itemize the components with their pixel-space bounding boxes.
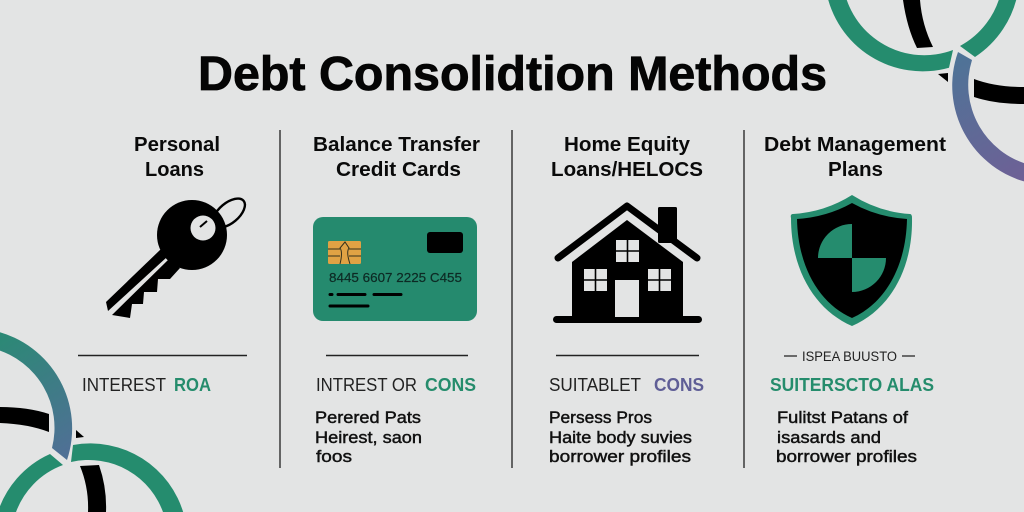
body text <box>776 409 917 466</box>
body text: foos <box>316 448 352 466</box>
row label: suitable cons: SUITABLET <box>549 375 641 395</box>
body text: borrower profiles <box>776 448 917 466</box>
heading: personal loans: Loans <box>145 159 204 181</box>
body text: Fulitst Patans of <box>777 409 908 427</box>
heading: personal loans: Personal <box>134 134 220 156</box>
row label: interest or cons: INTREST OR <box>316 375 417 395</box>
body text: Haite body suvies <box>549 429 692 447</box>
row label: interest or cons <box>316 375 476 395</box>
heading: balance transfer: Credit Cards <box>336 159 461 181</box>
row label: interest or cons: CONS <box>425 375 476 395</box>
sub-label with dashes: ISPEA BUUSTO <box>802 349 897 364</box>
icon: credit card: 8445 6607 2225 C455 <box>329 270 462 285</box>
heading: home equity: Loans/HELOCS <box>551 159 703 181</box>
icon: key <box>106 193 250 318</box>
rule <box>326 354 468 356</box>
rule <box>556 354 699 356</box>
panel: personal loans <box>78 134 250 395</box>
heading: debt management: Plans <box>828 159 883 181</box>
body text: isasards and <box>777 429 881 447</box>
body text <box>549 409 692 466</box>
row label: interest: ROA <box>174 375 211 395</box>
panel: home equity loans <box>549 134 704 466</box>
icon: shield <box>791 195 912 326</box>
body text: Persess Pros <box>549 409 652 427</box>
rule <box>78 354 247 356</box>
heading: debt management <box>764 134 946 181</box>
heading: home equity: Home Equity <box>564 134 691 156</box>
row label: interest: INTEREST <box>82 375 166 395</box>
body text: Perered Pats <box>315 409 421 427</box>
body text <box>315 409 422 466</box>
decorative rings: top right <box>826 0 1024 183</box>
heading: balance transfer <box>313 134 480 181</box>
row label: suitability: SUITERSCTO ALAS <box>770 375 934 395</box>
body text: borrower profiles <box>549 448 691 466</box>
row label: suitable cons <box>549 375 704 395</box>
panel: debt management plans <box>764 134 946 466</box>
heading: balance transfer: Balance Transfer <box>313 134 480 156</box>
panel: balance transfer credit cards <box>313 134 480 466</box>
body text: Heirest, saon <box>315 429 422 447</box>
icon: house <box>553 206 702 323</box>
heading: debt management: Debt Management <box>764 134 946 156</box>
heading: home equity <box>551 134 703 181</box>
decorative rings: bottom left <box>0 331 184 512</box>
title: Debt Consolidtion Methods <box>198 48 827 101</box>
row label: interest <box>82 375 211 395</box>
row label: suitable cons: CONS <box>654 375 704 395</box>
heading: personal loans <box>134 134 220 181</box>
icon: credit card <box>313 217 477 321</box>
column dividers <box>280 130 744 468</box>
